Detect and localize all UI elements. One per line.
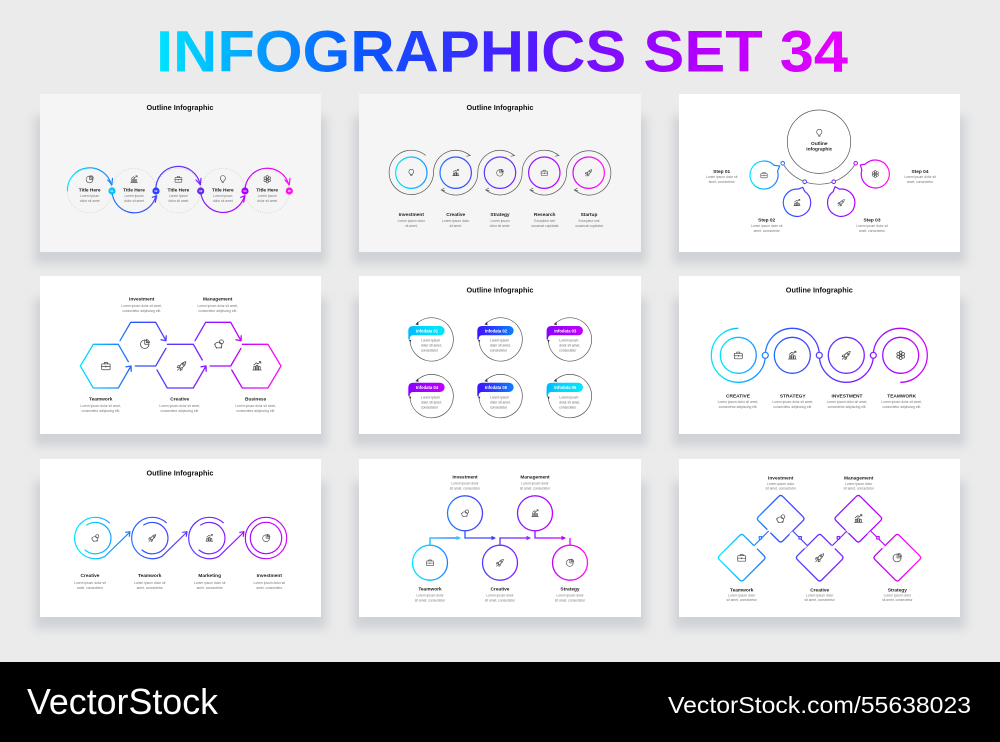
label: research: Research <box>534 212 556 218</box>
icon: chart <box>131 176 137 182</box>
label: creative <box>485 587 516 602</box>
step text 2: Lorem ipsum <box>124 194 144 198</box>
footer brand: VectorStock <box>27 681 219 722</box>
icon: briefcase <box>738 554 746 561</box>
label: creative: sit amet. <box>449 224 462 228</box>
icon: rocket <box>838 200 844 206</box>
label: strategy: Lorem ipsum <box>490 219 510 223</box>
icon: bulb <box>817 129 822 136</box>
icon: chart <box>253 362 261 370</box>
label: step 02: amet, consectetur <box>754 229 781 233</box>
numbered nodes: 01 <box>111 189 114 193</box>
step text 5: Title Here <box>256 187 278 193</box>
label: step 01: Step 01 <box>713 169 731 175</box>
card: infodata 06: dolor sit amet, <box>559 400 580 404</box>
label: investment <box>398 212 426 228</box>
heading: outline infographic: Outline Infographic <box>786 286 853 295</box>
panel: circular timeline with five titles <box>40 94 321 252</box>
label: step 03: Lorem ipsum dolor sit <box>856 224 888 228</box>
label: marketing <box>194 573 226 590</box>
icon: pie <box>263 534 270 542</box>
step text 1: Title Here <box>79 187 101 193</box>
numbered nodes: 03 <box>199 189 203 193</box>
icon: briefcase <box>734 352 742 359</box>
step text 2: dolor sit amet <box>124 199 144 203</box>
icon: gear <box>896 351 905 360</box>
numbered nodes: 05 <box>288 189 291 193</box>
label: investment <box>121 297 162 313</box>
label: investment: INVESTMENT <box>832 393 863 399</box>
inner rings <box>720 337 919 373</box>
label: step 03: amet, consectetur <box>859 229 886 233</box>
large centre circle <box>787 110 851 173</box>
label: startup: Startup <box>581 212 597 218</box>
centre heading: Infographic <box>806 147 833 153</box>
label: investment: Lorem ipsum dolor <box>451 482 480 486</box>
wave line <box>711 328 927 382</box>
card: infodata 04: dolor sit amet, <box>421 400 442 404</box>
step text 2: Title Here <box>123 187 145 193</box>
card: infodata 05: dolor sit amet, <box>490 400 511 404</box>
label: management: Lorem ipsum dolor <box>845 482 873 486</box>
card: infodata 04: Infodata 04 <box>416 385 439 390</box>
card: infodata 03: dolor sit amet, <box>559 344 580 348</box>
card: infodata 01: consectetur <box>421 349 439 353</box>
label: strategy: sit amet, consectetur <box>882 598 913 602</box>
label: management <box>843 476 875 490</box>
panel: central circle with four speech bubbles <box>679 94 960 252</box>
card: infodata 06: consectetur <box>559 405 577 409</box>
label: investment <box>254 573 285 590</box>
card: infodata 05: Infodata 05 <box>485 385 508 390</box>
card: infodata 02: Lorem ipsum <box>490 339 509 343</box>
connecting arc <box>783 163 856 184</box>
speech bubble rings <box>750 160 889 216</box>
heading: outline infographic: Outline Infographic <box>466 286 534 295</box>
arrow heads <box>456 536 566 540</box>
label: teamwork: sit amet, consectetur <box>726 598 758 602</box>
label: step 03: Step 03 <box>863 218 881 224</box>
label: creative: consectetur adipiscing elit. <box>160 409 199 413</box>
label: management: consectetur adipiscing elit. <box>198 309 237 313</box>
label: creative: sit amet, consectetur <box>485 598 516 602</box>
label: strategy <box>882 587 913 602</box>
label: teamwork <box>881 393 922 409</box>
label: step 04: Lorem ipsum dolor sit <box>904 175 936 179</box>
card: infodata 05 <box>477 374 522 418</box>
card: infodata 03: Lorem ipsum <box>559 339 579 343</box>
step text 3: Lorem ipsum <box>169 194 188 198</box>
label: startup: occaecat cupidatat <box>575 224 603 228</box>
label: step 04: amet, consectetur <box>907 180 934 184</box>
heading: outline infographic: Outline Infographic <box>146 103 214 112</box>
label: creative: Lorem ipsum dolor <box>806 594 834 598</box>
numbered nodes <box>108 187 293 195</box>
label: business: Lorem ipsum dolor sit amet, <box>235 404 276 408</box>
label: investment: Investment <box>257 573 282 579</box>
label: investment: amet, consectetur <box>256 586 283 590</box>
label: teamwork: consectetur adipiscing elit. <box>882 405 921 409</box>
card: infodata 04 <box>408 374 453 418</box>
panel: connected diamonds <box>679 459 960 617</box>
label: teamwork: Lorem ipsum dolor <box>728 594 756 598</box>
footer bar <box>0 662 1000 742</box>
label: investment <box>827 393 867 409</box>
winding arrow lines <box>389 150 611 195</box>
panel: five circles with winding arrows <box>359 94 641 252</box>
label: investment: sit amet, consectetur <box>450 486 481 490</box>
label: teamwork <box>134 573 166 590</box>
label: creative: Lorem ipsum dolor <box>442 219 470 223</box>
icon: pie <box>86 176 93 183</box>
label: management: Management <box>844 476 874 482</box>
flowing arrow arcs <box>67 166 290 213</box>
step text 4 <box>212 187 234 203</box>
label: research <box>531 212 559 228</box>
card: infodata 02: consectetur <box>490 349 508 353</box>
label: strategy: consectetur adipiscing elit. <box>773 405 812 409</box>
label: management: Management <box>203 297 233 303</box>
label: step 04 <box>904 169 936 184</box>
step text 4: dolor sit amet <box>213 199 233 203</box>
panel: interlocking hexagons <box>40 276 321 434</box>
numbered nodes: 04 <box>244 189 247 193</box>
card: infodata 03: consectetur <box>559 349 577 353</box>
panel: rings with diagonal arrows <box>40 459 321 617</box>
icon: pie <box>893 553 902 562</box>
label: strategy: sit amet, consectetur <box>555 598 586 602</box>
label: investment: consectetur adipiscing elit. <box>828 405 866 409</box>
label: teamwork <box>726 587 758 602</box>
label: strategy: Lorem ipsum dolor sit amet, <box>772 400 813 404</box>
label: business <box>235 396 276 413</box>
label: step 02: Step 02 <box>758 218 776 224</box>
icon: rocket <box>149 535 156 542</box>
label: creative: consectetur adipiscing elit. <box>719 405 757 409</box>
ring arrows <box>75 517 287 559</box>
step text 1: dolor sit amet <box>80 199 100 203</box>
step text 5: dolor sit amet <box>257 199 277 203</box>
card: infodata 01: Infodata 01 <box>416 328 439 333</box>
label: research: Excepteur sint <box>534 219 555 223</box>
icon: rocket <box>842 351 850 360</box>
label: strategy <box>772 393 813 409</box>
label: investment: Investment <box>452 475 478 481</box>
card: infodata 01: dolor sit amet, <box>421 344 442 348</box>
label: marketing: amet, consectetur <box>197 586 224 590</box>
label: creative <box>159 396 200 413</box>
card: infodata 04: consectetur <box>421 405 439 409</box>
icon: chart <box>788 351 796 359</box>
label: strategy: dolor sit amet. <box>490 224 510 228</box>
label: step 04: Step 04 <box>911 169 929 175</box>
label: strategy <box>555 587 586 602</box>
label: strategy: Strategy <box>888 587 907 593</box>
dotted circles <box>67 168 290 213</box>
label: creative <box>74 573 106 590</box>
label: creative: Creative <box>810 587 829 593</box>
label: strategy: STRATEGY <box>780 393 806 399</box>
card: infodata 04: Lorem ipsum <box>421 395 440 399</box>
label: teamwork: Teamwork <box>418 587 442 593</box>
label: strategy: Lorem ipsum dolor <box>884 594 912 598</box>
label: management: Lorem ipsum dolor sit amet, <box>197 304 238 308</box>
step text 3: Title Here <box>168 187 190 193</box>
label: investment: Lorem ipsum dolor sit amet, <box>121 304 162 308</box>
label: strategy: Lorem ipsum dolor <box>556 594 585 598</box>
icon: briefcase <box>102 363 110 370</box>
icon: rocket <box>177 362 186 371</box>
label: teamwork: Teamwork <box>89 396 113 402</box>
label: management: sit amet, consectetur <box>520 486 551 490</box>
card: infodata 06: Infodata 06 <box>554 385 577 390</box>
icon: gear <box>872 171 879 177</box>
label: creative: Creative <box>491 587 510 593</box>
icon: piggy <box>91 535 99 541</box>
label: investment: Investment <box>129 297 155 303</box>
icon: briefcase <box>427 560 433 566</box>
card: infodata 02: dolor sit amet, <box>490 344 511 348</box>
step text 1 <box>79 187 101 203</box>
label: step 02: Lorem ipsum dolor sit <box>751 224 783 228</box>
card: infodata 02: Infodata 02 <box>485 328 508 333</box>
label: teamwork: Lorem ipsum dolor sit amet, <box>881 400 922 404</box>
junction nodes <box>762 352 876 358</box>
icon: chart <box>854 515 862 522</box>
label: investment: Lorem ipsum dolor sit <box>254 581 285 585</box>
label: investment: Lorem ipsum dolor <box>398 219 426 223</box>
icon: briefcase <box>761 172 767 178</box>
circles <box>412 496 588 580</box>
label: creative: Lorem ipsum dolor sit amet, <box>718 400 758 404</box>
label: research: occaecat cupidatat <box>531 224 559 228</box>
icon: pie <box>497 169 503 176</box>
label: creative: Lorem ipsum dolor sit <box>74 581 106 585</box>
panel: six infodata circles <box>359 276 641 434</box>
label: creative: CREATIVE <box>726 393 751 399</box>
panel: four rings on a wave line <box>679 276 960 434</box>
label: strategy <box>490 212 510 228</box>
label: step 02 <box>751 218 783 233</box>
icon: briefcase <box>175 176 182 182</box>
connection dots <box>781 162 858 184</box>
label: creative: Lorem ipsum dolor sit amet, <box>159 404 200 408</box>
label: teamwork: Lorem ipsum dolor sit amet, <box>80 404 121 408</box>
icon: pie <box>566 559 574 566</box>
step text 3: dolor sit amet <box>169 199 188 203</box>
step text 1: Lorem ipsum <box>80 194 99 198</box>
step text 2 <box>123 187 145 203</box>
label: creative: Lorem ipsum dolor <box>486 594 515 598</box>
label: startup <box>575 212 603 228</box>
label: creative: Creative <box>170 396 189 402</box>
footer url: VectorStock.com/55638023 <box>668 692 971 718</box>
label: management: sit amet, consectetur <box>843 486 875 490</box>
icon: rocket <box>585 170 592 176</box>
label: management <box>197 297 238 313</box>
label: business: consectetur adipiscing elit. <box>236 409 275 413</box>
label: investment: Investment <box>399 212 424 218</box>
label: investment <box>450 475 481 490</box>
centre heading: Outline <box>811 141 828 147</box>
icon: chart <box>452 169 459 176</box>
step text 4: Title Here <box>212 187 234 193</box>
card: infodata 01 <box>408 318 453 361</box>
label: teamwork: amet, consectetur <box>137 586 164 590</box>
label: teamwork: consectetur adipiscing elit. <box>81 409 120 413</box>
label: creative <box>442 212 470 228</box>
card: infodata 05: consectetur <box>490 405 508 409</box>
label: teamwork <box>415 587 446 602</box>
stepped connector arrows <box>430 531 570 545</box>
label: teamwork: TEAMWORK <box>887 393 917 399</box>
label: investment: Lorem ipsum dolor <box>767 482 795 486</box>
icon: gear <box>264 176 271 183</box>
label: step 01: Lorem ipsum dolor sit <box>706 175 738 179</box>
label: step 01 <box>706 169 738 184</box>
label: investment: sit amet. <box>405 224 418 228</box>
label: teamwork: Teamwork <box>730 587 754 593</box>
numbered nodes: 02 <box>155 189 158 193</box>
label: investment: Lorem ipsum dolor sit amet, <box>827 400 867 404</box>
edge gaps <box>754 529 885 548</box>
label: management <box>520 475 551 490</box>
label: creative <box>718 393 758 409</box>
label: creative: amet, consectetur <box>77 586 104 590</box>
label: teamwork: Teamwork <box>138 573 162 579</box>
step text 5: Lorem ipsum <box>258 194 277 198</box>
hexagon arrows <box>80 322 281 388</box>
icon: briefcase <box>541 170 548 176</box>
icon: pie <box>140 339 150 349</box>
label: teamwork: Lorem ipsum dolor <box>416 594 445 598</box>
label: strategy: Strategy <box>490 212 510 218</box>
heading: outline infographic: Outline Infographic <box>466 103 534 112</box>
label: creative <box>804 587 836 602</box>
icon: bulb <box>409 169 414 176</box>
label: business: Business <box>245 396 267 402</box>
card: infodata 05: Lorem ipsum <box>490 395 509 399</box>
card: infodata 06: Lorem ipsum <box>559 395 579 399</box>
inner gradient rings <box>396 157 604 188</box>
label: startup: Excepteur sint <box>579 219 600 223</box>
label: creative: Creative <box>81 573 100 579</box>
connectors with nodes <box>754 531 885 546</box>
icon: rocket <box>496 559 503 566</box>
heading: outline infographic: Outline Infographic <box>146 468 214 477</box>
step text 4: Lorem ipsum <box>213 194 233 198</box>
main title: INFOGRAPHICS SET 34 <box>156 20 848 84</box>
icon: chart <box>794 199 800 206</box>
label: step 01: amet, consectetur <box>709 180 736 184</box>
panel: circles with stepped arrows <box>359 459 641 617</box>
label: investment: sit amet, consectetur <box>765 486 797 490</box>
label: management: Lorem ipsum dolor <box>521 482 550 486</box>
icon: bulb <box>220 176 225 182</box>
label: management: Management <box>520 475 550 481</box>
label: creative: sit amet, consectetur <box>804 598 836 602</box>
icon: piggy <box>776 515 785 523</box>
label: teamwork: sit amet, consectetur <box>415 598 446 602</box>
label: investment: consectetur adipiscing elit. <box>122 309 161 313</box>
label: creative: Creative <box>446 212 465 218</box>
card: infodata 03: Infodata 03 <box>554 328 577 333</box>
icon: rocket <box>815 554 824 562</box>
centre heading <box>806 141 833 153</box>
card: infodata 06 <box>547 374 592 418</box>
label: teamwork <box>80 396 121 413</box>
label: investment: Investment <box>768 476 794 482</box>
label: investment <box>765 476 797 490</box>
step text 3 <box>168 187 190 203</box>
label: step 03 <box>856 218 888 233</box>
card: infodata 01: Lorem ipsum <box>421 339 440 343</box>
diamonds <box>718 495 921 581</box>
label: marketing: Marketing <box>198 573 221 579</box>
icon: chart <box>206 534 213 541</box>
card: infodata 02 <box>477 318 522 361</box>
step text 5 <box>256 187 278 203</box>
label: strategy: Strategy <box>560 587 580 593</box>
card: infodata 03 <box>547 318 592 361</box>
icon: piggy <box>214 340 223 348</box>
label: teamwork: Lorem ipsum dolor sit <box>134 581 166 585</box>
icon: chart <box>532 510 538 517</box>
label: marketing: Lorem ipsum dolor sit <box>194 581 226 585</box>
icon: piggy <box>461 510 469 517</box>
